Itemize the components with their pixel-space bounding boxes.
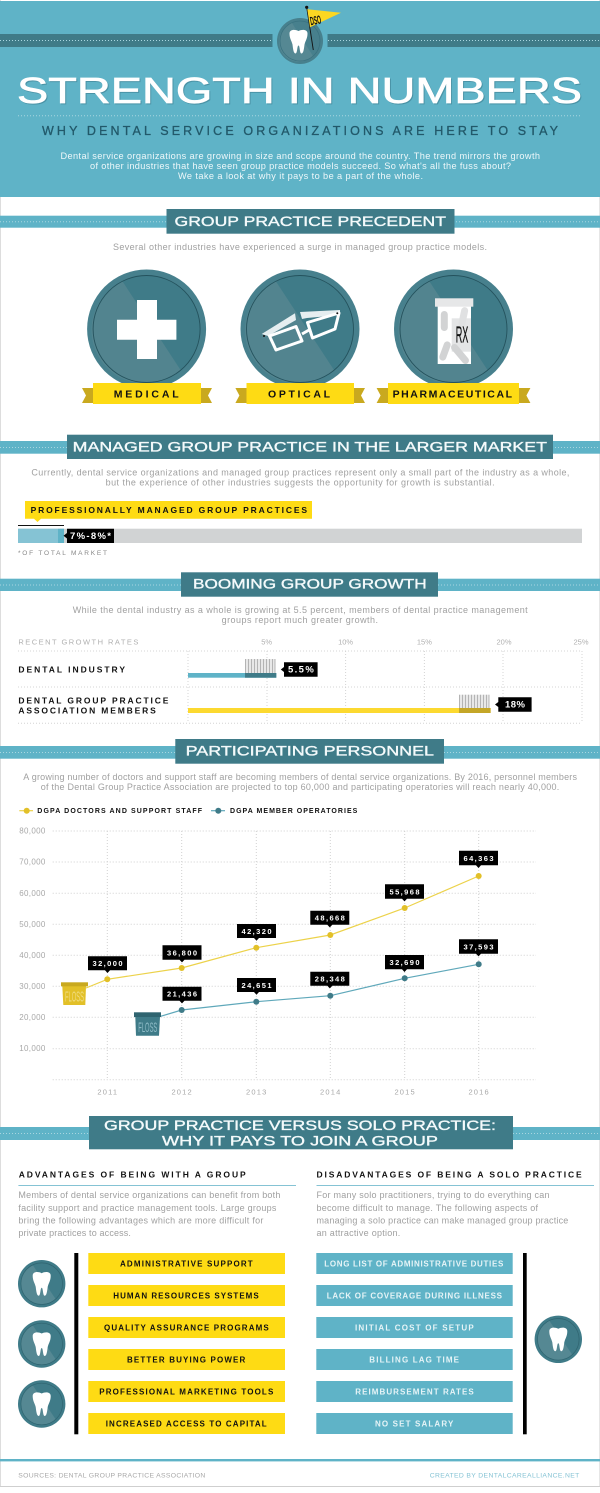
intro text: Several other industries have experienced a surge in managed group practice models. xyxy=(113,242,487,252)
list: disadvantages: LACK OF COVERAGE DURING ILLNESS xyxy=(327,1292,503,1301)
ribbon: optical: OPTICAL xyxy=(268,389,331,401)
text: disadvantages paragraph: become difficult to manage. The following aspects of xyxy=(316,1203,538,1213)
icon: teal floss container xyxy=(134,1012,161,1036)
row: dental industry xyxy=(18,659,318,678)
heading: GROUP PRACTICE VERSUS SOLO PRACTICE: xyxy=(104,1117,496,1133)
line chart: 2016 xyxy=(468,1088,490,1097)
line chart: 2014 xyxy=(320,1088,342,1097)
ribbon: medical xyxy=(82,383,212,404)
text: disadvantages paragraph: For many solo practitioners, trying to do everything can xyxy=(316,1190,550,1200)
list: disadvantages: REIMBURSEMENT RATES xyxy=(355,1388,474,1397)
bar chart: recent growth rates: 15% xyxy=(417,638,432,647)
intro text xyxy=(23,772,578,792)
data labels: 37,593 xyxy=(464,942,494,951)
data labels: 36,800 xyxy=(167,948,197,957)
intro text: A growing number of doctors and support staff are becoming members of dental service organizations. By 2016, personnel members xyxy=(23,772,578,782)
line chart: FLOSS xyxy=(65,988,84,1006)
row: dental group practice association members: 18% xyxy=(505,700,526,711)
list: advantages: PROFESSIONAL MARKETING TOOLS xyxy=(99,1388,274,1397)
intro text: but the experience of other industries suggests the opportunity for growth is substantial. xyxy=(106,478,495,488)
list: disadvantages: BILLING LAG TIME xyxy=(369,1356,460,1365)
line chart: 2013 xyxy=(246,1088,268,1097)
icon: tooth badge with DSO flag xyxy=(277,6,341,64)
column: advantages heading: ADVANTAGES OF BEING WITH A GROUP xyxy=(19,1170,246,1180)
footnote: *OF TOTAL MARKET xyxy=(18,550,107,557)
bar chart: recent growth rates: 10% xyxy=(338,638,353,647)
list: disadvantages: NO SET SALARY xyxy=(375,1420,454,1429)
list: disadvantages: INITIAL COST OF SETUP xyxy=(355,1324,474,1333)
data labels: 32,690 xyxy=(390,958,420,967)
data labels: 42,320 xyxy=(242,927,272,936)
text: advantages paragraph: facility support and practice management tools. Large groups xyxy=(18,1203,277,1213)
intro text xyxy=(60,151,540,181)
line chart: 2015 xyxy=(394,1088,416,1097)
footer xyxy=(0,1459,600,1487)
intro text xyxy=(73,605,528,625)
icon: tooth badge with DSO flag: DSO xyxy=(309,13,322,28)
list: advantages: HUMAN RESOURCES SYSTEMS xyxy=(113,1292,259,1301)
text: disadvantages paragraph: an attractive option. xyxy=(316,1228,400,1238)
text: advantages paragraph: private practices to access. xyxy=(18,1228,131,1238)
heading xyxy=(89,1116,513,1149)
ribbon: pharmaceutical: PHARMACEUTICAL xyxy=(393,389,513,401)
text: advantages paragraph xyxy=(18,1190,280,1238)
heading xyxy=(166,209,454,234)
heading xyxy=(67,435,553,459)
line chart: FLOSS xyxy=(138,1019,157,1035)
line chart xyxy=(19,827,536,1097)
icon: medical badge xyxy=(87,270,206,388)
list: advantages: QUALITY ASSURANCE PROGRAMS xyxy=(104,1324,269,1333)
callout: professionally managed group practices xyxy=(25,501,312,522)
list: advantages: INCREASED ACCESS TO CAPITAL xyxy=(106,1420,267,1429)
intro text: Dental service organizations are growing in size and scope around the country. The trend mirrors the growth xyxy=(60,151,540,161)
line chart: 2012 xyxy=(171,1088,193,1097)
intro text: Currently, dental service organizations and managed group practices represent only a small part of the industry as a whole, xyxy=(31,468,569,478)
intro text: We take a look at why it pays to be a part of the whole. xyxy=(178,171,423,181)
ribbon: medical: MEDICAL xyxy=(114,389,179,401)
row: dental industry: DENTAL INDUSTRY xyxy=(18,665,125,675)
legend xyxy=(19,808,358,815)
section: group practice precedent xyxy=(0,209,600,404)
list: advantages: ADMINISTRATIVE SUPPORT xyxy=(120,1260,253,1269)
list: disadvantages: LONG LIST OF ADMINISTRATIVE DUTIES xyxy=(324,1260,504,1269)
intro text: groups report much greater growth. xyxy=(222,615,378,625)
text: advantages paragraph: bring the following advantages which are more difficult for xyxy=(18,1216,263,1226)
line chart: 50,000 xyxy=(19,920,46,929)
data labels: 28,348 xyxy=(315,975,345,984)
credit: CREATED BY DENTALCAREALLIANCE.NET xyxy=(430,1473,579,1480)
bar chart: recent growth rates: 5% xyxy=(261,638,272,647)
line chart: 20,000 xyxy=(19,1013,46,1022)
icon: tooth badge group xyxy=(18,1260,65,1428)
series: member operatories xyxy=(155,961,482,1018)
heading: PARTICIPATING PERSONNEL xyxy=(186,743,434,759)
icon: tooth badge solo xyxy=(535,1316,582,1363)
line chart: 70,000 xyxy=(19,858,46,867)
line chart: 80,000 xyxy=(19,827,46,836)
market share bar xyxy=(18,529,582,543)
legend: DGPA DOCTORS AND SUPPORT STAFF xyxy=(37,808,203,815)
data labels: 55,968 xyxy=(390,887,420,896)
bar chart: recent growth rates: RECENT GROWTH RATES xyxy=(18,638,138,647)
data labels xyxy=(88,851,498,1003)
heading: GROUP PRACTICE PRECEDENT xyxy=(174,213,447,229)
callout: professionally managed group practices: PROFESSIONALLY MANAGED GROUP PRACTICES xyxy=(31,505,307,515)
market share bar: 7%-8%* xyxy=(70,531,111,542)
text: advantages paragraph: Members of dental service organizations can benefit from both xyxy=(18,1190,280,1200)
icon: optical badge xyxy=(240,270,360,388)
row: dental group practice association members: ASSOCIATION MEMBERS xyxy=(18,705,156,715)
data labels: 21,436 xyxy=(167,990,197,999)
bar chart: recent growth rates: 20% xyxy=(496,638,512,647)
line chart: 2011 xyxy=(97,1088,118,1097)
list: disadvantages xyxy=(316,1253,513,1434)
icon: pharmaceutical badge xyxy=(394,270,513,388)
data labels: 32,000 xyxy=(92,959,122,968)
sources: SOURCES: DENTAL GROUP PRACTICE ASSOCIATION xyxy=(18,1473,205,1480)
section: managed group practice in the larger market xyxy=(0,435,600,557)
intro text: While the dental industry as a whole is growing at 5.5 percent, members of dental practice management xyxy=(73,605,528,615)
legend: DGPA MEMBER OPERATORIES xyxy=(230,808,358,815)
section: group practice versus solo practice xyxy=(0,1116,600,1434)
row: dental group practice association members: DENTAL GROUP PRACTICE xyxy=(18,695,169,705)
heading: WHY IT PAYS TO JOIN A GROUP xyxy=(162,1132,438,1148)
bar chart: recent growth rates xyxy=(18,638,589,723)
list: advantages: BETTER BUYING POWER xyxy=(127,1356,246,1365)
text: disadvantages paragraph xyxy=(316,1190,568,1238)
header panel xyxy=(0,1,600,197)
heading xyxy=(181,572,438,597)
line chart: 40,000 xyxy=(19,951,46,960)
icon: yellow floss container xyxy=(61,982,88,1006)
ribbon: optical xyxy=(235,383,365,404)
line chart: 60,000 xyxy=(19,889,46,898)
heading: MANAGED GROUP PRACTICE IN THE LARGER MARKET xyxy=(73,439,548,455)
heading xyxy=(175,739,444,764)
subtitle: WHY DENTAL SERVICE ORGANIZATIONS ARE HERE TO STAY xyxy=(42,124,559,138)
data labels: 48,668 xyxy=(315,914,345,923)
row: dental industry: 5.5% xyxy=(288,664,314,675)
icon: pharmaceutical badge: RX xyxy=(456,322,468,348)
title: STRENGTH IN NUMBERS xyxy=(17,70,582,111)
data labels: 24,651 xyxy=(242,981,272,990)
line chart: 10,000 xyxy=(19,1044,46,1053)
intro text: of other industries that have seen group practice models succeed. So what's all the fuss about? xyxy=(90,161,511,171)
text: disadvantages paragraph: managing a solo practice can make managed group practice xyxy=(316,1216,568,1226)
heading: BOOMING GROUP GROWTH xyxy=(193,576,427,592)
data labels: 64,363 xyxy=(464,854,494,863)
column: disadvantages heading: DISADVANTAGES OF BEING A SOLO PRACTICE xyxy=(316,1170,582,1180)
line chart: 30,000 xyxy=(19,982,46,991)
section: participating personnel xyxy=(0,739,600,1097)
intro text xyxy=(31,468,569,488)
list: advantages xyxy=(88,1253,285,1434)
intro text: of the Dental Group Practice Association are projected to top 60,000 and participating operatories will reach nearly 40,000. xyxy=(41,782,559,792)
bar chart: recent growth rates: 25% xyxy=(573,638,589,647)
row: dental group practice association members xyxy=(18,695,532,715)
series: doctors and support staff xyxy=(86,873,482,988)
section: booming group growth xyxy=(0,572,600,723)
ribbon: pharmaceutical xyxy=(377,383,530,404)
